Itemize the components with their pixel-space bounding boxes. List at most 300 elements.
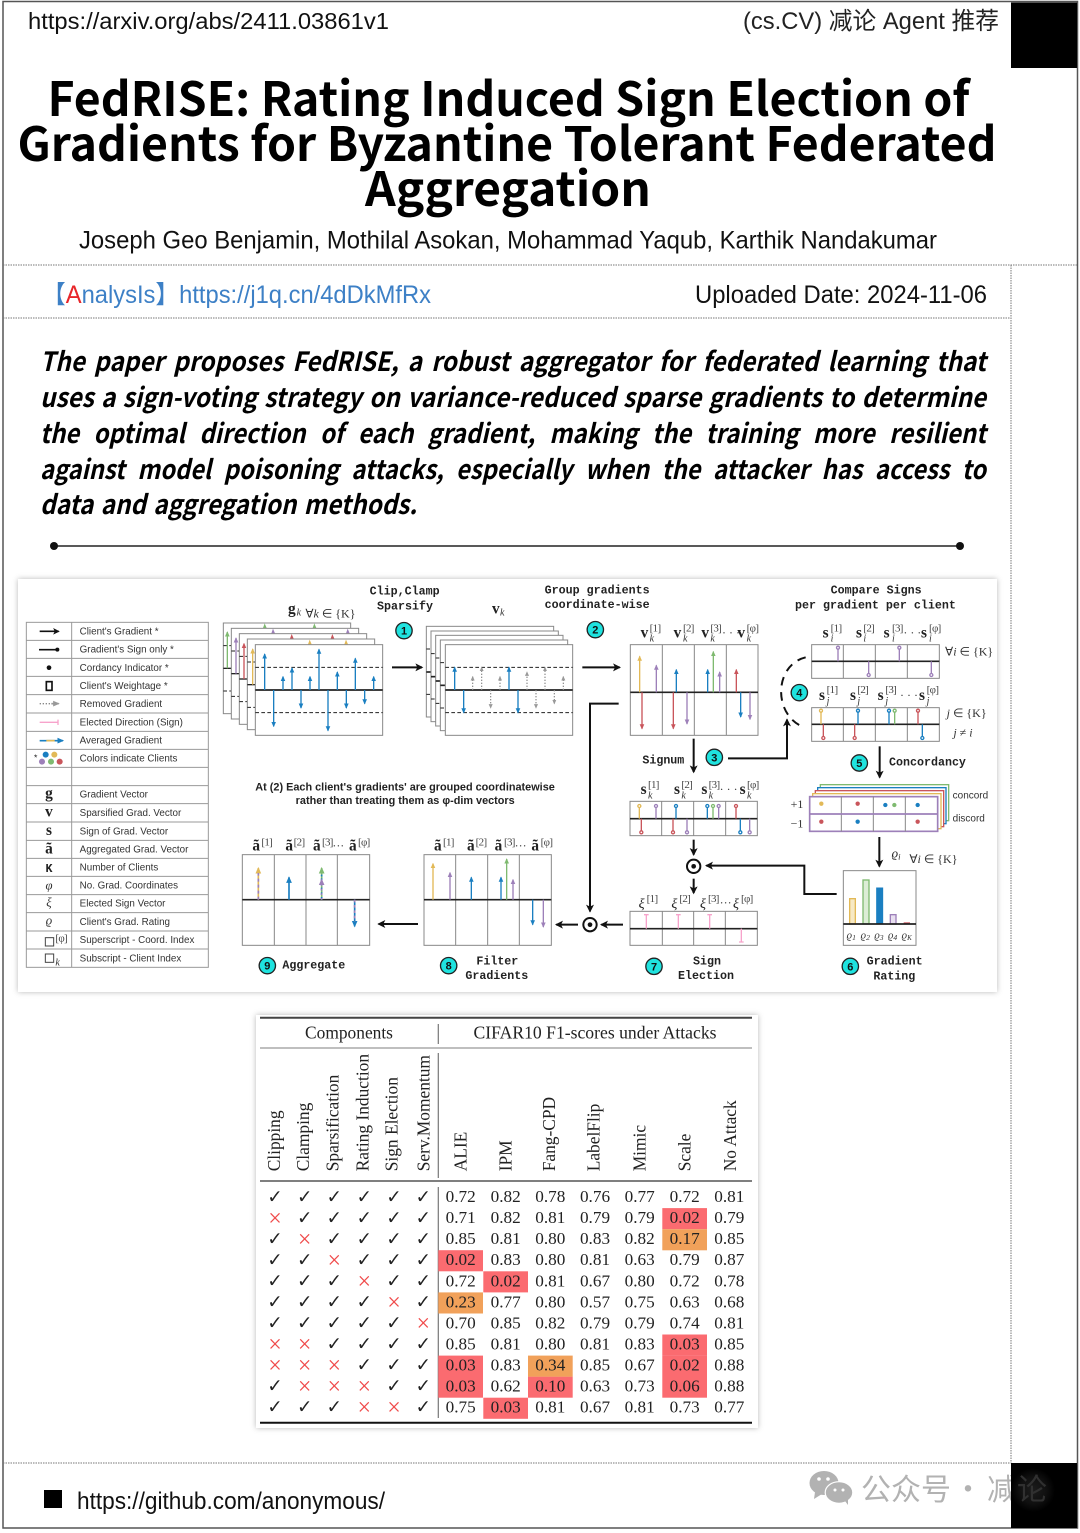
stage 9: aggregate: ··· (332, 838, 344, 852)
F1 score values: 0.85 (714, 1229, 744, 1248)
F1 score values: 0.03 (446, 1377, 476, 1396)
legend table: ξ (46, 896, 52, 910)
component check marks: ✓ (327, 1229, 342, 1250)
stage 6: gradient rating: ϱ (902, 931, 907, 942)
stage 8: filter gradients: Gradients (465, 969, 528, 983)
component check marks: ✓ (386, 1187, 402, 1208)
header: category: (cs.CV) 减论 Agent 推荐 (743, 8, 999, 35)
legend table: Client's Grad. Rating (80, 917, 170, 928)
stage 2: coordinate-wise gradients: [1] (650, 622, 660, 634)
note: coordinatewise grouping: At (2) Each client's gradients' are grouped coordinatewise (255, 782, 555, 794)
F1 score values: 0.23 (446, 1292, 476, 1311)
component check marks: ✓ (267, 1313, 283, 1334)
rotated column headers: Mimic (630, 1125, 650, 1171)
F1 score values: 0.85 (446, 1334, 476, 1354)
component check marks: ✓ (267, 1397, 283, 1418)
stage 4: compare signs: s (921, 624, 927, 641)
stage 8: filter gradients: ã (495, 838, 503, 855)
stage 7: sign election: [2] (679, 893, 690, 905)
component check marks: × (328, 1353, 341, 1379)
F1 score values: 0.02 (446, 1250, 476, 1269)
rotated column headers: Serv.Momentum (413, 1055, 433, 1171)
legend table: Gradient's Sign only * (80, 645, 174, 656)
stage 6: gradient rating: 4 (893, 933, 897, 942)
stage 3: signum: [1] (648, 779, 659, 791)
stage 3: signum: [3] (709, 779, 719, 791)
analysis link: 【AnalysIs】https://j1q.cn/4dDkMfRx (42, 281, 431, 309)
F1 score values: 0.81 (625, 1398, 655, 1417)
stage 8: filter gradients (424, 837, 552, 983)
component check marks: ✓ (416, 1187, 431, 1208)
footer link: https://github.com/anonymous/ (77, 1488, 385, 1515)
component check marks: ✓ (327, 1187, 342, 1208)
stage 2: coordinate-wise gradients: v (641, 624, 649, 641)
legend table: [φ] (55, 932, 67, 944)
stage 9: aggregate: ã (252, 838, 260, 855)
upload date: Uploaded Date: 2024-11-06 (695, 281, 987, 309)
stage 3: signum: [2] (681, 779, 692, 791)
stage 5: concordancy: discord (953, 813, 985, 824)
note: coordinatewise grouping (255, 782, 555, 807)
stage 7: sign election: 7 (651, 961, 657, 973)
F1 score values: 0.83 (625, 1334, 655, 1354)
stage 3: signum: [φ] (747, 779, 759, 791)
watermark text: · (953, 1465, 983, 1509)
rotated column headers (264, 1054, 740, 1171)
component check marks: × (298, 1332, 311, 1358)
stage 9: aggregate: [φ] (358, 837, 370, 849)
stage 8: filter gradients: ã (467, 838, 475, 855)
F1 score values: 0.34 (535, 1356, 566, 1375)
component check marks: ✓ (267, 1187, 283, 1208)
component check marks: ✓ (297, 1187, 312, 1208)
component check marks: ✓ (357, 1334, 372, 1355)
legend table: Client's Gradient * (80, 627, 159, 638)
stage 8: filter gradients: [1] (443, 837, 454, 849)
F1 score values: 0.81 (491, 1334, 521, 1354)
F1 score values: 0.85 (491, 1313, 521, 1332)
F1 score values: 0.88 (714, 1356, 744, 1375)
stage 4: compare signs: s (878, 687, 884, 704)
corner block bottom right: 论 (1017, 1465, 1047, 1509)
stage 3: signum: k (709, 791, 714, 802)
component check marks: × (328, 1248, 341, 1274)
stage 3: signum: s (641, 781, 647, 798)
stage 2: coordinate-wise gradients: [3] (710, 622, 721, 634)
component check marks: ✓ (386, 1271, 402, 1292)
stage 6: gradient rating: ϱ (847, 931, 852, 942)
F1 score values: 0.79 (580, 1313, 610, 1332)
legend table: Elected Direction (Sign) (80, 717, 183, 728)
component check marks: ✓ (357, 1250, 372, 1271)
stage 4: compare signs: 4 (796, 688, 803, 700)
legend table (26, 622, 208, 968)
stage 4: compare signs: [2] (863, 622, 874, 634)
stage 7: sign election: ξ (733, 897, 739, 912)
component check marks: × (268, 1206, 282, 1232)
stage 4: compare signs: s (850, 687, 856, 704)
stage 4: compare signs: i (831, 634, 834, 645)
legend table: Colors indicate Clients (80, 753, 178, 764)
F1 score values: 0.68 (714, 1292, 744, 1311)
component check marks: ✓ (357, 1208, 372, 1229)
F1 score values: 0.72 (446, 1187, 476, 1206)
F1 score values: 0.06 (670, 1377, 700, 1396)
stage 9: aggregate: [3] (322, 837, 333, 849)
corner block bottom right (1011, 1463, 1077, 1528)
stage 8: filter gradients: [2] (476, 837, 486, 849)
F1 score values: 0.81 (580, 1250, 610, 1269)
rotated column headers: Fang-CPD (539, 1097, 559, 1171)
stage 6: gradient rating: ϱ (892, 846, 898, 860)
F1 score values: 0.03 (491, 1398, 521, 1417)
F1 score values: 0.88 (714, 1377, 744, 1396)
component check marks: × (298, 1374, 311, 1400)
stage 1: client gradients stack: 1 (401, 626, 407, 638)
F1 score values: 0.80 (535, 1334, 565, 1354)
stage 7: sign election: Sign (693, 955, 721, 969)
F1 score values: 0.82 (491, 1187, 521, 1206)
component check marks: ✓ (357, 1187, 372, 1208)
stage 1: client gradients stack: ∀k ∈ {K} (305, 606, 355, 620)
component check marks: ✓ (416, 1334, 431, 1355)
component check marks: ✓ (357, 1292, 372, 1313)
stage 9: aggregate: 9 (264, 961, 270, 973)
stage 4: compare signs: i (892, 634, 895, 645)
F1 score values: 0.82 (491, 1208, 521, 1227)
F1 score values: 0.77 (491, 1292, 521, 1311)
authors: Joseph Geo Benjamin, Mothilal Asokan, Mohammad Yaqub, Karthik Nandakumar (79, 226, 937, 254)
component check marks: × (358, 1269, 371, 1295)
F1 score values: 0.02 (670, 1356, 700, 1375)
stage 6: gradient rating: Gradient (867, 955, 923, 969)
stage 7: sign election: [φ] (741, 893, 753, 905)
footer bullet (44, 1490, 62, 1508)
F1 score values: 0.70 (446, 1313, 476, 1332)
stage 8: filter gradients: 8 (446, 961, 452, 973)
component check marks: ✓ (327, 1271, 342, 1292)
abstract: the optimal direction of each gradient, making the training more resilient (40, 412, 989, 451)
panel: F1-score table (256, 1015, 758, 1428)
legend table: Sign of Grad. Vector (80, 826, 169, 837)
F1 score values: 0.81 (491, 1229, 521, 1248)
component check marks: × (328, 1374, 341, 1400)
stage 1 labels: k (500, 607, 505, 618)
rotated column headers: LabelFlip (583, 1103, 603, 1171)
header: arXiv url: https://arxiv.org/abs/2411.03861v1 (28, 8, 389, 34)
stage 9: aggregate: [2] (294, 837, 304, 849)
stage 2: coordinate-wise gradients: k (650, 634, 655, 645)
component check marks: ✓ (297, 1292, 312, 1313)
component check marks: ✓ (297, 1271, 312, 1292)
F1 score values: 0.73 (670, 1398, 700, 1417)
stage 3: signum: k (681, 791, 686, 802)
stage 6: gradient rating: 2 (866, 933, 870, 942)
stage 2: coordinate-wise gradients: k (747, 634, 752, 645)
rotated column headers: Clamping (293, 1102, 313, 1171)
rotated column headers: Sparsification (322, 1074, 342, 1171)
F1 score values: 0.81 (535, 1398, 565, 1417)
component check marks: ✓ (267, 1292, 283, 1313)
table heading: components: Components (305, 1022, 393, 1042)
stage 4: compare signs: i (929, 634, 932, 645)
stage 6: gradient rating: i (898, 851, 901, 861)
stage 4: compare signs: [1] (827, 684, 837, 696)
stage 6: gradient rating (706, 837, 957, 983)
stage 1: client gradients stack: g (288, 600, 296, 617)
stage 9: aggregate: ã (349, 838, 357, 855)
stage 1 labels (370, 584, 650, 638)
stage 1: client gradients stack (223, 600, 412, 735)
stage 4: compare signs: j ≠ i (951, 726, 973, 740)
F1 score values (446, 1187, 745, 1417)
component check marks: ✓ (327, 1313, 342, 1334)
legend table: g (45, 785, 53, 802)
F1 score values: 0.72 (670, 1187, 700, 1206)
legend table: s (46, 822, 52, 839)
stage 5: concordancy: −1 (791, 816, 803, 830)
stage 4: compare signs: s (919, 687, 925, 704)
F1 score values: 0.82 (535, 1313, 565, 1332)
stage 4: compare signs: [φ] (927, 684, 938, 696)
legend table: Cordancy Indicator * (80, 663, 169, 674)
stage 4: compare signs: [3] (885, 684, 896, 696)
stage 8: filter gradients: [φ] (541, 837, 552, 849)
stage 4: compare signs: j (883, 696, 888, 707)
stage 9: aggregate: Aggregate (282, 959, 345, 973)
F1 score values: 0.80 (625, 1271, 655, 1290)
stage 7: sign election: Election (678, 969, 734, 983)
component check marks: ✓ (416, 1208, 431, 1229)
stage 4: compare signs: Compare Signs (831, 584, 922, 598)
component check marks: ✓ (386, 1355, 402, 1376)
F1 score values: 0.85 (714, 1334, 744, 1354)
stage 4: compare signs: · · · (900, 688, 918, 702)
stage 4: compare signs: s (856, 624, 862, 641)
rotated column headers: Sign Election (381, 1077, 401, 1171)
F1 score values: 0.79 (580, 1208, 610, 1227)
F1 score values: 0.81 (535, 1208, 565, 1227)
component check marks: ✓ (267, 1229, 283, 1250)
F1 score values: 0.81 (535, 1271, 565, 1290)
F1 score values: 0.81 (714, 1313, 744, 1332)
F1 score values: 0.63 (625, 1250, 655, 1269)
component check marks: × (417, 1311, 430, 1337)
stage 3: signum: k (648, 791, 653, 802)
legend table: Number of Clients (80, 863, 158, 874)
stage 4: compare signs: per gradient per client (795, 598, 956, 612)
stage 1: client gradients stack: k (297, 607, 302, 618)
stage 7: sign election: [1] (647, 893, 657, 905)
stage 1 labels: Group gradients (545, 584, 650, 598)
stage 8: filter gradients: ··· (515, 838, 527, 852)
component check marks: ✓ (416, 1292, 431, 1313)
highlighted cells (438, 1208, 707, 1419)
stage 3: signum: s (740, 781, 746, 798)
stage 4: compare signs: j (825, 696, 830, 707)
F1 score values: 0.03 (446, 1356, 476, 1375)
component check marks: ✓ (416, 1229, 431, 1250)
abstract: data and aggregation methods. (40, 483, 417, 522)
component check marks: ✓ (297, 1208, 312, 1229)
F1 score values: 0.62 (491, 1377, 521, 1396)
stage 2: sparsified stack (392, 626, 620, 735)
component check marks: ✓ (386, 1208, 402, 1229)
stage 6: gradient rating: ϱ (874, 931, 880, 942)
F1 score values: 0.67 (625, 1356, 655, 1375)
component check marks: ✓ (416, 1397, 431, 1418)
component check marks: × (387, 1395, 401, 1421)
stage 8: filter gradients: Filter (476, 955, 518, 969)
stage 9: aggregate: ã (313, 838, 321, 855)
F1 score values: 0.77 (625, 1187, 655, 1206)
stage 6: gradient rating: 3 (879, 933, 884, 942)
stage 8: filter gradients: ã (531, 838, 539, 855)
legend table: Aggregated Grad. Vector (80, 845, 189, 856)
legend table: * (34, 753, 38, 763)
stage 4: compare signs: [3] (892, 622, 903, 634)
watermark icon (810, 1471, 853, 1505)
F1 score values: 0.71 (446, 1208, 476, 1227)
component check marks: ✓ (386, 1313, 402, 1334)
legend table: Subscript - Client Index (80, 953, 181, 964)
F1 score values: 0.87 (714, 1250, 745, 1269)
component check marks: ✓ (327, 1292, 342, 1313)
stage 8: filter gradients: [3] (504, 837, 515, 849)
F1 score values: 0.03 (670, 1334, 700, 1354)
stage 3: signum: s (701, 781, 707, 798)
stage 4: compare signs: s (819, 687, 825, 704)
component check marks: ✓ (416, 1250, 431, 1271)
legend table: Superscript - Coord. Index (80, 935, 194, 946)
stage 6: gradient rating: 6 (847, 961, 853, 973)
component check marks: ✓ (327, 1397, 342, 1418)
stage 7: sign election: ··· (720, 895, 732, 909)
F1 score values: 0.63 (670, 1292, 700, 1311)
stage 4: compare signs: ∀i ∈ {K} (945, 644, 993, 658)
rotated column headers: Rating Induction (352, 1054, 372, 1171)
component check marks: ✓ (386, 1229, 402, 1250)
F1 score values: 0.02 (670, 1208, 700, 1227)
watermark text: 减 (987, 1465, 1017, 1509)
stage 5: concordancy: 5 (856, 758, 862, 770)
F1 score values: 0.79 (625, 1313, 655, 1332)
component check marks: ✓ (297, 1250, 312, 1271)
arrow: gradients to filter operator (556, 704, 623, 931)
F1 score values: 0.83 (491, 1356, 521, 1375)
panel: FedRISE workflow figure (18, 579, 997, 992)
F1 score values: 0.63 (580, 1377, 610, 1396)
component check marks: ✓ (267, 1250, 283, 1271)
stage 2: coordinate-wise gradients: v (737, 624, 745, 641)
component check marks: ✓ (357, 1355, 372, 1376)
stage 2: coordinate-wise gradients: k (683, 634, 688, 645)
stage 2: coordinate-wise gradients: [φ] (747, 622, 758, 634)
stage 4: compare signs: · · · (903, 625, 921, 639)
stage 7: sign election (630, 840, 757, 983)
component check marks: ✓ (357, 1229, 372, 1250)
stage 8: filter gradients: ã (434, 838, 442, 855)
stage 7: sign election: [3] (708, 893, 719, 905)
rotated column headers: No Attack (720, 1100, 740, 1171)
stage 1 labels: coordinate-wise (545, 598, 650, 612)
F1 score values: 0.83 (580, 1229, 610, 1248)
F1 score values: 0.10 (535, 1377, 565, 1396)
abstract: The paper proposes FedRISE, a robust aggregator for federated learning that (40, 340, 989, 379)
stage 9: aggregate: ã (285, 838, 293, 855)
F1 score values: 0.80 (535, 1250, 565, 1269)
component check marks: ✓ (416, 1376, 431, 1397)
stage 4: compare signs: [1] (831, 622, 841, 634)
stage 5: concordancy (791, 746, 988, 831)
F1 score values: 0.75 (625, 1292, 655, 1311)
F1 score values: 0.67 (580, 1271, 610, 1290)
legend table: ϱ (46, 914, 53, 928)
stage 2: coordinate-wise gradients: · · · (722, 625, 740, 639)
component check marks: ✓ (267, 1271, 283, 1292)
legend table: Gradient Vector (80, 790, 149, 801)
F1 score values: 0.73 (625, 1377, 655, 1396)
table heading: attacks: CIFAR10 F1-scores under Attacks (474, 1022, 717, 1042)
F1 score values: 0.67 (580, 1398, 610, 1417)
component check marks: × (387, 1290, 401, 1316)
watermark text (861, 1465, 1017, 1509)
stage 6: gradient rating: Rating (873, 969, 915, 983)
component check marks: ✓ (327, 1208, 342, 1229)
rotated column headers: ALIE (451, 1132, 471, 1171)
stage 6: gradient rating: ϱ (861, 931, 866, 942)
component check marks: ✓ (297, 1313, 312, 1334)
F1 score values: 0.80 (535, 1292, 565, 1311)
stage 6: gradient rating: 1 (852, 933, 856, 942)
F1 score values: 0.02 (491, 1271, 521, 1290)
F1 score values: 0.80 (535, 1229, 565, 1248)
stage 9: aggregate: [1] (261, 837, 272, 849)
title: Gradients for Byzantine Tolerant Federated (18, 106, 996, 175)
stage 1 labels: Sparsify (377, 600, 433, 614)
component check marks: ✓ (416, 1271, 431, 1292)
abstract: against model poisoning attacks, especially when the attacker has access to (40, 448, 988, 487)
stage 1 labels: 2 (592, 625, 598, 637)
F1 score values: 0.81 (714, 1187, 744, 1206)
stage 4: compare signs: j (925, 696, 930, 707)
title: Aggregation (364, 151, 651, 220)
F1 score values: 0.85 (446, 1229, 476, 1248)
corner block top right (1011, 2, 1077, 68)
component check marks: × (358, 1395, 371, 1421)
F1 score values: 0.75 (446, 1398, 476, 1417)
legend table: No. Grad. Coordinates (80, 881, 178, 892)
note: coordinatewise grouping: rather than treating them as φ-dim vectors (296, 795, 515, 807)
F1 score values: 0.79 (670, 1250, 700, 1269)
stage 2: coordinate-wise gradients: v (701, 624, 709, 641)
stage 4: compare signs: i (863, 634, 866, 645)
F1 score values: 0.78 (714, 1271, 744, 1290)
legend table: Sparsified Grad. Vector (80, 808, 182, 819)
component check marks: ✓ (267, 1376, 283, 1397)
rotated column headers: Scale (675, 1133, 695, 1171)
stage 3: signum: k (747, 791, 752, 802)
F1 score values: 0.78 (535, 1187, 565, 1206)
component check marks: ✓ (416, 1355, 431, 1376)
F1 score values: 0.83 (491, 1250, 521, 1269)
stage 3: signum (630, 739, 759, 836)
stage 4: compare signs: s (823, 624, 829, 641)
stage 5: concordancy: +1 (791, 797, 803, 811)
legend table: ã (45, 840, 53, 857)
component check marks: ✓ (297, 1397, 312, 1418)
legend table: Elected Sign Vector (80, 899, 166, 910)
